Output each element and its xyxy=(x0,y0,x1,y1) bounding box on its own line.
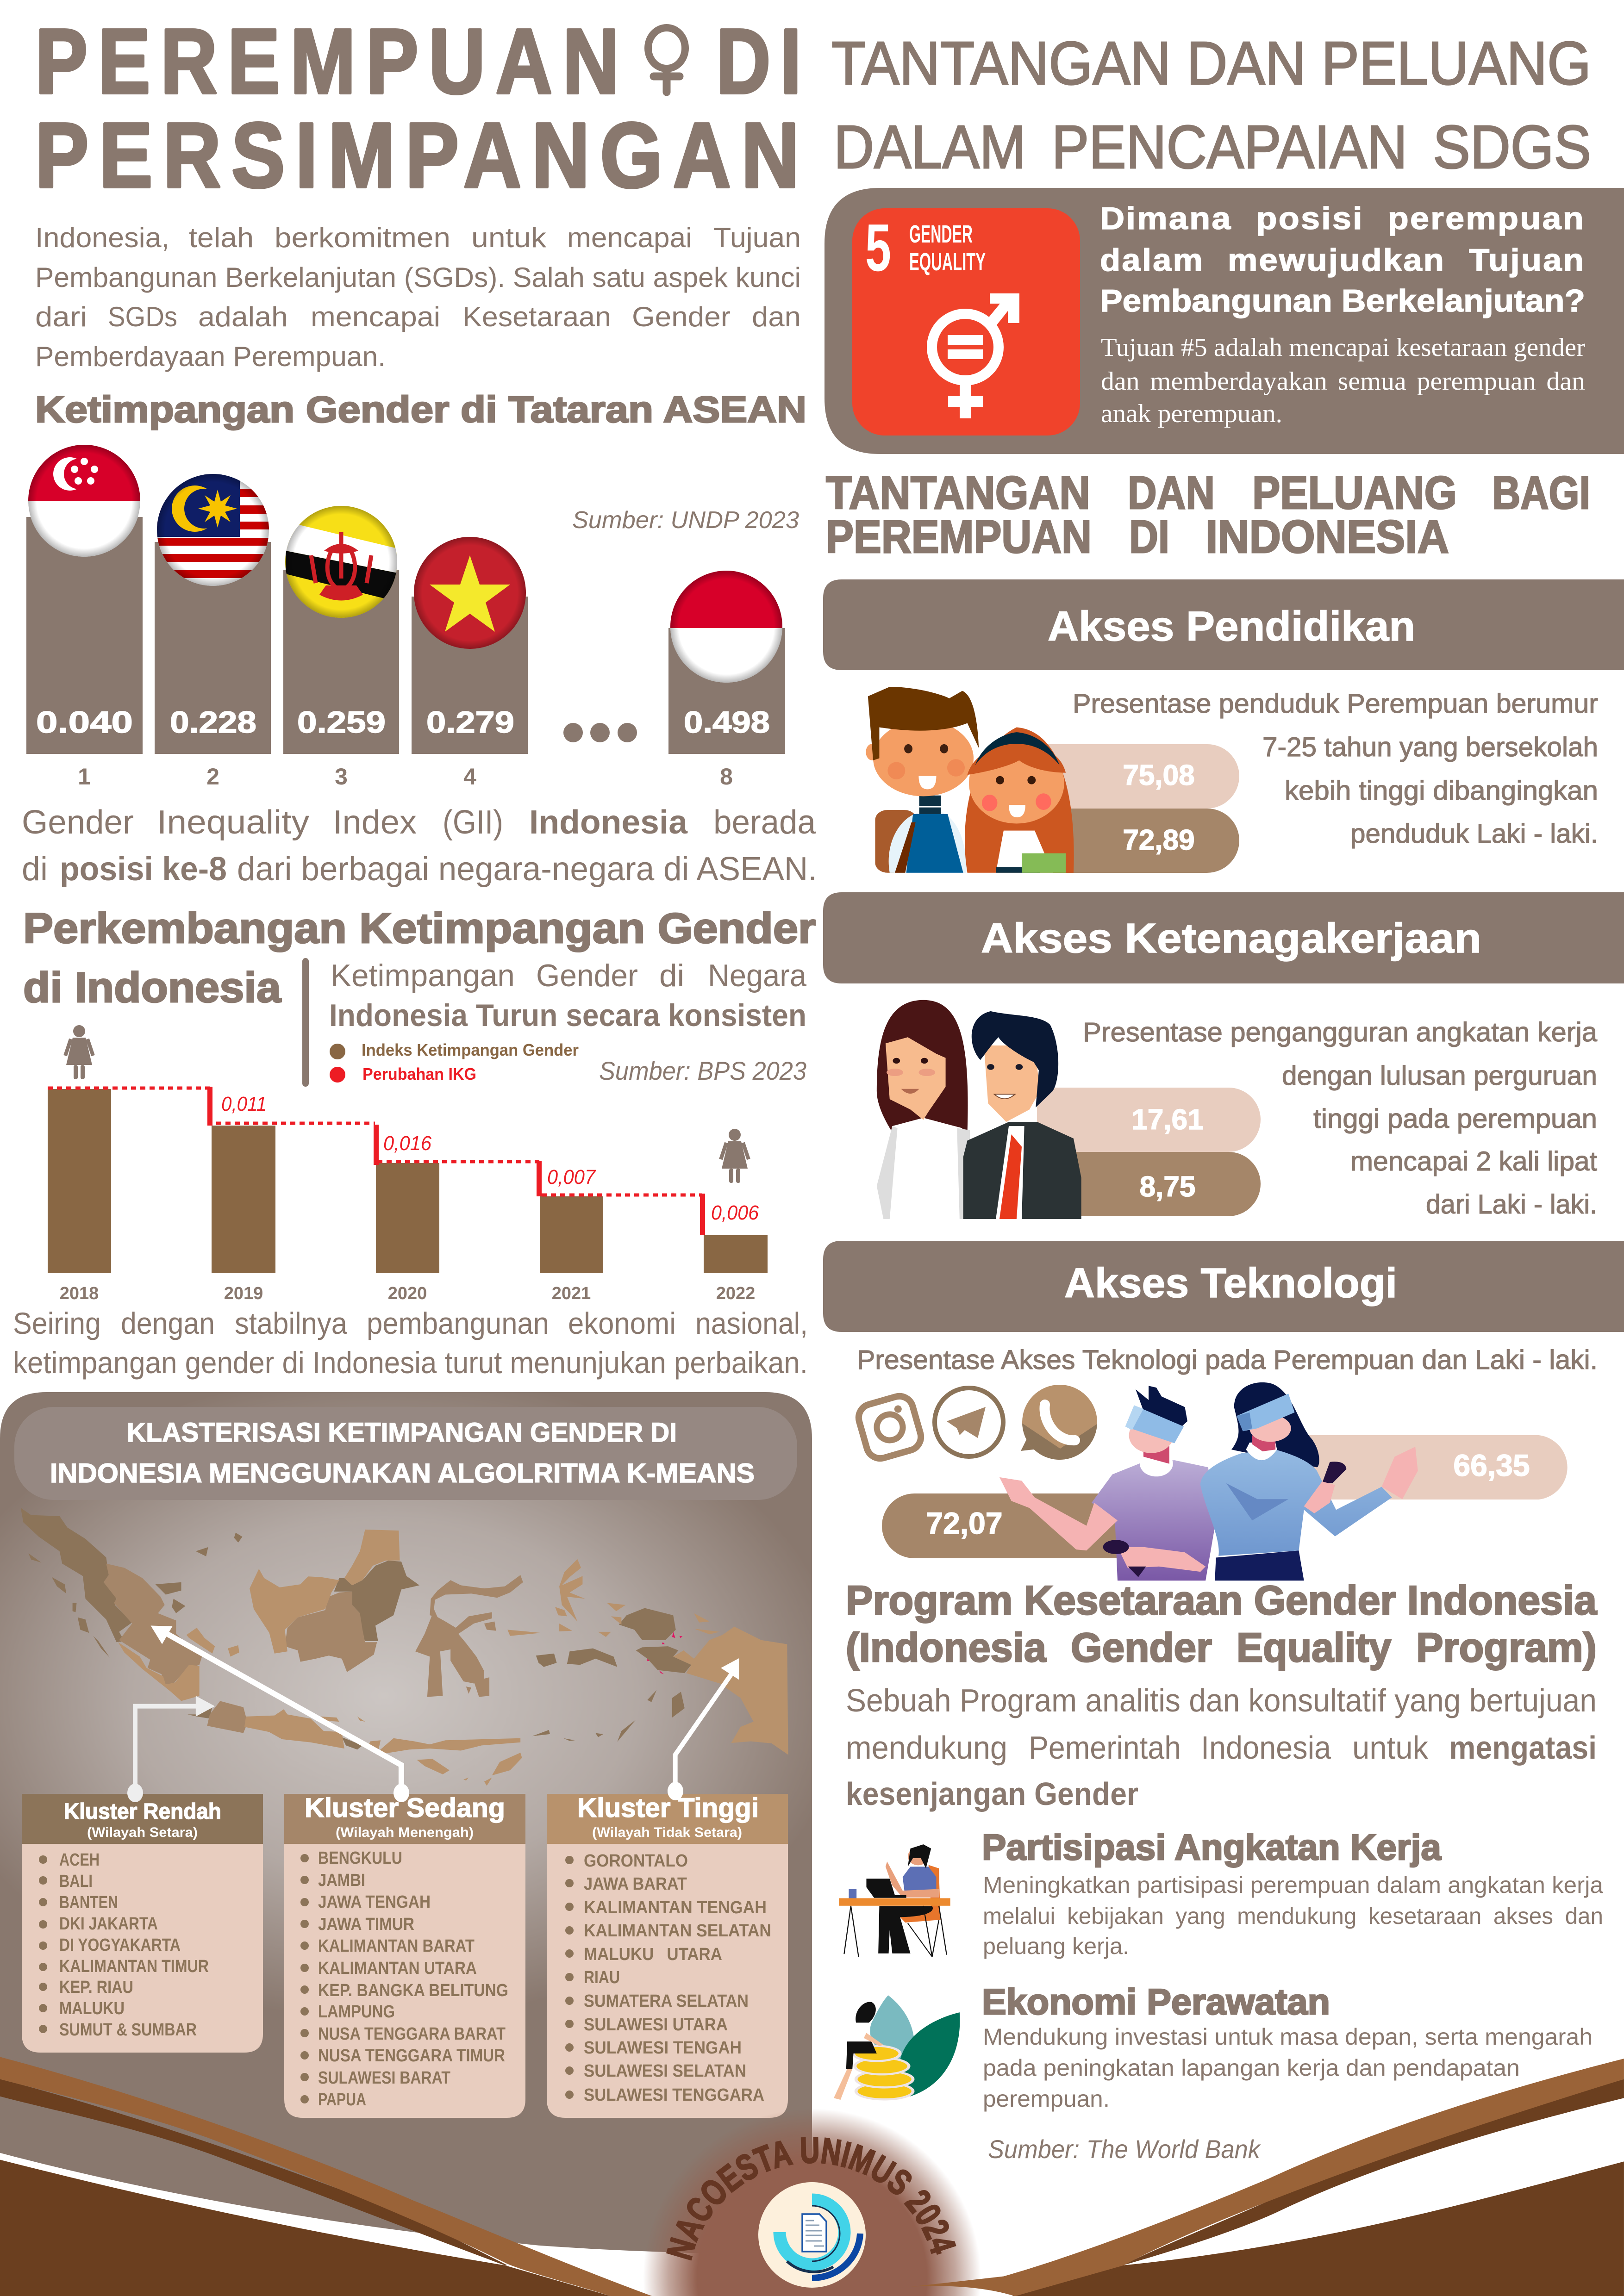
panel title: KLASTERISASI KETIMPANGAN GENDER DI xyxy=(127,1418,677,1448)
card: Kluster Tinggi: (Wilayah Tidak Setara) xyxy=(592,1825,742,1840)
heading: Tantangan dan Peluang bagi Perempuan: INDONESIA xyxy=(1206,511,1449,563)
GII paragraph: Index xyxy=(333,804,417,841)
section bar: Akses Teknologi: Akses Teknologi xyxy=(1064,1260,1397,1307)
list: Tinggi: SUMATERA SELATAN xyxy=(584,1991,749,2011)
bar values xyxy=(36,705,770,739)
icon: whatsapp xyxy=(1018,1384,1102,1462)
arrow: Kluster Rendah xyxy=(127,1696,215,1801)
heading: Tantangan dan Peluang bagi Perempuan: DI xyxy=(1129,511,1169,563)
heading: Tantangan dan Peluang bagi Perempuan: DAN xyxy=(1128,467,1215,519)
change labels: 0,006 xyxy=(711,1201,759,1224)
text: partisipasi description: peluang kerja. xyxy=(983,1933,1129,1959)
list: Tinggi: GORONTALO xyxy=(584,1851,688,1871)
pills: teknologi values xyxy=(882,1435,1568,1558)
footer wave left xyxy=(0,2057,725,2296)
list: Sedang: KEP. BANGKA BELITUNG xyxy=(318,1981,508,2000)
list: Rendah: KALIMANTAN TIMUR xyxy=(59,1957,209,1976)
footer wave right xyxy=(912,2059,1624,2296)
heading: Perkembangan Ketimpangan xyxy=(23,905,816,1011)
list: Sedang: NUSA TENGGARA TIMUR xyxy=(318,2046,505,2066)
logo glow xyxy=(643,2109,981,2296)
paragraph: Seiring dengan: ketimpangan gender di Indonesia turut menunjukan perbaikan. xyxy=(13,1345,808,1380)
intro paragraph: Pemberdayaan Perempuan. xyxy=(35,341,386,372)
question heading xyxy=(1100,201,1585,318)
source: BPS: Sumber: BPS 2023 xyxy=(599,1056,806,1085)
flag: Brunei xyxy=(285,506,397,618)
list: Rendah: BALI xyxy=(59,1872,93,1891)
intro paragraph: untuk xyxy=(471,222,547,253)
heading: Ketimpangan Gender ASEAN: Ketimpangan Gender di Tataran ASEAN xyxy=(35,389,806,430)
bar values: 0.279 xyxy=(426,705,514,739)
question heading: Dimana posisi perempuan xyxy=(1100,201,1585,236)
legend: Indeks Ketimpangan Gender xyxy=(362,1040,579,1059)
intro paragraph: SGDs xyxy=(108,301,177,332)
description: Tujuan #5 adalah mencapai kesetaraan gender xyxy=(1101,333,1585,362)
card: Kluster Rendah: Kluster Rendah xyxy=(64,1799,221,1824)
icon: SDG 5 red tile: GENDER xyxy=(909,220,973,248)
GII paragraph: posisi ke-8 xyxy=(60,851,227,888)
list: Tinggi: SULAWESI TENGAH xyxy=(584,2038,742,2058)
paragraph: ketenagakerjaan: dari Laki - laki. xyxy=(1426,1189,1597,1220)
GII paragraph: Inequality xyxy=(157,804,309,841)
year labels: 2020 xyxy=(388,1284,427,1303)
pills: ketenagakerjaan values: 8,75 xyxy=(1140,1171,1195,1203)
GII paragraph: berada xyxy=(713,804,816,841)
intro paragraph: telah xyxy=(189,222,254,253)
section bar: Akses Teknologi xyxy=(823,1241,1624,1332)
paragraph: program description: Pemerintah xyxy=(1029,1730,1181,1766)
heading: Perkembangan Ketimpangan: Perkembangan Ketimpangan Gender xyxy=(23,905,816,952)
icon: SDG 5 red tile: EQUALITY xyxy=(909,248,986,276)
map: Indonesia clusters xyxy=(21,1508,788,1786)
GII paragraph xyxy=(22,804,817,888)
year labels: 2022 xyxy=(716,1284,755,1303)
bar values: 0.228 xyxy=(170,705,256,739)
panel title xyxy=(14,1407,797,1500)
paragraph: pendidikan: 7-25 tahun yang bersekolah xyxy=(1262,732,1598,762)
title: Perempuan di Persimpangan: PEREMPUAN xyxy=(35,10,630,113)
rank labels: 1 xyxy=(78,764,91,790)
list: Tinggi: RIAU xyxy=(584,1968,620,1987)
paragraph: pendidikan: Presentase penduduk Perempuan berumur xyxy=(1073,689,1598,719)
list: Sedang: JAWA TIMUR xyxy=(318,1915,414,1934)
illustration: woman at desk xyxy=(839,1844,950,1957)
list: Sedang: SULAWESI BARAT xyxy=(318,2068,450,2088)
bar values: 0.040 xyxy=(36,705,133,739)
bar values: 0.498 xyxy=(684,705,770,739)
year labels: 2019 xyxy=(224,1284,263,1303)
title: Perempuan di Persimpangan: PERSIMPANGAN xyxy=(35,104,810,207)
intro paragraph xyxy=(35,222,801,372)
flag: Malaysia xyxy=(157,474,269,586)
paragraph: ketenagakerjaan: tinggi pada perempuan xyxy=(1313,1104,1597,1134)
card: Kluster Rendah: (Wilayah Setara) xyxy=(87,1825,198,1840)
icon: SDG 5 red tile: 5 xyxy=(865,210,891,285)
heading: Tantangan dan Peluang bagi Perempuan: PEREMPUAN xyxy=(826,511,1092,563)
intro paragraph: mencapai xyxy=(567,222,692,253)
legend: Perubahan IKG xyxy=(362,1064,476,1083)
list: Tinggi: SULAWESI UTARA xyxy=(584,2015,728,2035)
text: teknologi caption: Presentase Akses Teknologi pada Perempuan dan Laki - laki. xyxy=(857,1345,1598,1375)
subtitle: Tantangan dan Peluang xyxy=(831,29,1591,181)
arrow: Kluster Tinggi xyxy=(668,1658,739,1799)
arrow: Kluster Sedang xyxy=(151,1625,409,1801)
section bar: Akses Pendidikan: Akses Pendidikan xyxy=(1048,604,1415,650)
intro paragraph: Gender xyxy=(632,301,731,332)
year labels xyxy=(60,1284,755,1303)
intro paragraph: Kesetaraan xyxy=(462,301,611,332)
intro paragraph: berkomitmen xyxy=(275,222,450,253)
icon: female symbol xyxy=(648,28,685,92)
text: ekonomi description: Mendukung investasi untuk masa depan, serta mengarah xyxy=(983,2024,1593,2050)
GII paragraph: (GII) xyxy=(443,804,503,841)
source: World Bank: Sumber: The World Bank xyxy=(988,2134,1262,2164)
card: Kluster Sedang: Kluster Sedang xyxy=(305,1793,505,1823)
paragraph: program description: mendukung xyxy=(846,1730,1007,1766)
subheading: Indonesia turun: Ketimpangan xyxy=(331,958,515,993)
icon: woman 2018 xyxy=(65,1025,93,1079)
paragraph: program description: Indonesia xyxy=(1201,1730,1331,1766)
description: dan memberdayakan semua perempuan dan xyxy=(1101,367,1585,396)
list: Rendah: SUMUT & SUMBAR xyxy=(59,2020,197,2040)
icon: telegram xyxy=(935,1388,1003,1456)
intro paragraph: dari xyxy=(35,301,87,332)
list: Rendah: DI YOGYAKARTA xyxy=(59,1935,181,1955)
list: Tinggi: KALIMANTAN TENGAH xyxy=(584,1898,767,1917)
intro paragraph: dan xyxy=(752,301,801,332)
heading: Tantangan dan Peluang bagi Perempuan: TANTANGAN xyxy=(826,467,1090,519)
subheading: Indonesia turun: Negara xyxy=(708,958,806,993)
pills: pendidikan values: 75,08 xyxy=(1123,759,1195,791)
heading: Partisipasi Angkatan Kerja: Partisipasi Angkatan Kerja xyxy=(982,1827,1442,1867)
icon: instagram xyxy=(856,1393,924,1462)
subheading: Indonesia turun: di xyxy=(659,958,684,993)
pills: ketenagakerjaan values xyxy=(1037,1088,1261,1216)
paragraph: Seiring dengan: stabilnya xyxy=(235,1306,347,1340)
ellipsis dots xyxy=(563,723,637,742)
intro paragraph: Pembangunan Berkelanjutan (SGDs). Salah satu aspek kunci xyxy=(35,262,801,293)
list: Sedang xyxy=(300,1848,508,2109)
list: Sedang: BENGKULU xyxy=(318,1848,402,1868)
section bar: Akses Pendidikan xyxy=(823,579,1624,670)
paragraph: pendidikan: penduduk Laki - laki. xyxy=(1350,819,1598,849)
text: partisipasi description xyxy=(983,1872,1603,1959)
paragraph: Seiring dengan: ekonomi xyxy=(568,1306,676,1340)
list: Tinggi: KALIMANTAN SELATAN xyxy=(584,1921,771,1941)
panel: klasterisasi xyxy=(0,1392,812,2296)
intro paragraph: Indonesia, xyxy=(35,222,169,253)
heading: Tantangan dan Peluang bagi Perempuan: PELUANG xyxy=(1252,467,1457,519)
change labels: 0,016 xyxy=(383,1132,431,1155)
list: Sedang: KALIMANTAN UTARA xyxy=(318,1959,477,1978)
flag: Singapore xyxy=(28,444,141,557)
list: Rendah: BANTEN xyxy=(59,1893,118,1912)
icon: SDG 5 red tile xyxy=(852,208,1080,436)
divider bar xyxy=(302,958,309,1087)
section bar: Akses Ketenagakerjaan xyxy=(823,892,1624,983)
list: Tinggi: MALUKU UTARA xyxy=(584,1945,722,1964)
text: partisipasi description: Meningkatkan partisipasi perempuan dalam angkatan kerja xyxy=(983,1872,1603,1898)
source: UNDP: Sumber: UNDP 2023 xyxy=(572,507,799,534)
list: Tinggi xyxy=(565,1851,771,2105)
heading: Program Kesetaraan Gender: (Indonesia xyxy=(846,1624,1047,1670)
subheading: Indonesia turun: Gender xyxy=(536,958,638,993)
pills: ketenagakerjaan values: 17,61 xyxy=(1131,1104,1204,1136)
year labels: 2021 xyxy=(552,1284,591,1303)
pills: pendidikan values: 72,89 xyxy=(1123,824,1195,856)
paragraph: ketenagakerjaan: Presentase pengangguran angkatan kerja xyxy=(1083,1017,1598,1047)
bar chart: GII ASEAN ranking xyxy=(26,444,785,790)
rank labels xyxy=(78,764,733,790)
list: Rendah: KEP. RIAU xyxy=(59,1978,133,1997)
change labels: 0,011 xyxy=(221,1093,267,1115)
GII paragraph: di xyxy=(22,851,48,888)
paragraph: program description xyxy=(846,1682,1597,1812)
section bar: Akses Ketenagakerjaan: Akses Ketenagakerjaan xyxy=(981,915,1481,962)
GII paragraph: Indonesia xyxy=(529,804,688,841)
paragraph: program description: mengatasi xyxy=(1449,1730,1597,1766)
card: Kluster Sedang xyxy=(284,1784,525,2118)
year labels: 2018 xyxy=(60,1284,99,1303)
paragraph: Seiring dengan: dengan xyxy=(121,1306,215,1340)
list: Sedang: KALIMANTAN BARAT xyxy=(318,1936,475,1956)
paragraph: program description: untuk xyxy=(1352,1730,1429,1766)
card: Kluster Sedang: (Wilayah Menengah) xyxy=(336,1825,474,1840)
rank labels: 8 xyxy=(720,764,733,790)
heading: Tantangan dan Peluang bagi Perempuan: BAGI xyxy=(1492,467,1590,519)
bar chart: IKG 2018-2022 xyxy=(48,1025,768,1303)
card: Kluster Tinggi: Kluster Tinggi xyxy=(577,1793,759,1823)
pills: teknologi values: 66,35 xyxy=(1453,1448,1530,1482)
question heading: Pembangunan Berkelanjutan? xyxy=(1100,283,1585,318)
pills: pendidikan values xyxy=(1037,744,1239,873)
description xyxy=(1101,333,1585,428)
description: anak perempuan. xyxy=(1101,399,1282,428)
card: Kluster Tinggi xyxy=(547,1782,788,2118)
list: Tinggi: SULAWESI SELATAN xyxy=(584,2061,746,2081)
illustration: students xyxy=(866,687,1074,873)
marks: pink islands xyxy=(647,1632,682,1674)
paragraph: ketenagakerjaan: dengan lulusan perguruan xyxy=(1282,1061,1597,1091)
heading: Program Kesetaraan Gender: Program Kesetaraan Gender Indonesia xyxy=(846,1577,1597,1623)
question heading: dalam mewujudkan Tujuan xyxy=(1100,243,1585,278)
GII paragraph: dari berbagai negara-negara di ASEAN. xyxy=(237,851,817,888)
paragraph: Seiring dengan xyxy=(13,1306,808,1380)
rank labels: 4 xyxy=(463,764,476,790)
pills: teknologi values: 72,07 xyxy=(926,1506,1003,1540)
rank labels: 3 xyxy=(335,764,348,790)
paragraph: pendidikan: kebih tinggi dibangingkan xyxy=(1285,776,1598,806)
subheading: Indonesia turun: Indonesia Turun secara konsisten xyxy=(329,998,806,1033)
heading: Ekonomi Perawatan: Ekonomi Perawatan xyxy=(982,1981,1330,2022)
paragraph: ketenagakerjaan: mencapai 2 kali lipat xyxy=(1350,1146,1597,1176)
title: Perempuan di Persimpangan xyxy=(35,10,811,207)
panel: SDG 5 gender equality xyxy=(824,188,1624,454)
icon: woman 2022 xyxy=(721,1129,749,1183)
text: ekonomi description: perempuan. xyxy=(983,2086,1110,2112)
illustration: VR users xyxy=(999,1382,1418,1580)
logo: Nacoesta Unimus: NACOESTA UNIMUS 2024 xyxy=(659,2130,964,2264)
flag: Vietnam xyxy=(414,537,526,649)
paragraph: program description: Sebuah Program analitis dan konsultatif yang bertujuan xyxy=(846,1682,1597,1718)
list: Tinggi: SULAWESI TENGGARA xyxy=(584,2085,764,2105)
list: Rendah xyxy=(39,1850,209,2040)
list: Sedang: JAMBI xyxy=(318,1871,365,1890)
list: Rendah: DKI JAKARTA xyxy=(59,1914,158,1934)
rank labels: 2 xyxy=(206,764,219,790)
list: Rendah: ACEH xyxy=(59,1850,100,1870)
paragraph: ketenagakerjaan xyxy=(1083,1017,1598,1220)
text: ekonomi description: pada peningkatan lapangan kerja dan pendapatan xyxy=(983,2055,1520,2081)
change labels xyxy=(221,1093,759,1224)
heading: Program Kesetaraan Gender: Equality xyxy=(1237,1624,1391,1670)
list: Sedang: LAMPUNG xyxy=(318,2002,395,2022)
intro paragraph: Tujuan xyxy=(713,222,801,253)
intro paragraph: adalah xyxy=(198,301,288,332)
list: Rendah: MALUKU xyxy=(59,1999,125,2018)
panel title: INDONESIA MENGGUNAKAN ALGOLRITMA K-MEANS xyxy=(50,1458,755,1488)
paragraph: Seiring dengan: Seiring xyxy=(13,1306,101,1340)
paragraph: pendidikan xyxy=(1073,689,1598,849)
card: Kluster Rendah xyxy=(22,1784,263,2053)
paragraph: Seiring dengan: pembangunan xyxy=(367,1306,549,1340)
text: ekonomi description xyxy=(983,2024,1593,2112)
legend xyxy=(330,1040,579,1083)
paragraph: program description: kesenjangan Gender xyxy=(846,1776,1138,1812)
list: Sedang: NUSA TENGGARA BARAT xyxy=(318,2024,506,2044)
flag: Indonesia xyxy=(670,571,782,684)
illustration: woman on coins xyxy=(834,1995,960,2100)
list: Tinggi: JAWA BARAT xyxy=(584,1874,687,1894)
intro paragraph: mencapai xyxy=(311,301,440,332)
paragraph: Seiring dengan: nasional, xyxy=(695,1306,808,1340)
subheading: Indonesia turun xyxy=(329,958,806,1033)
change labels: 0,007 xyxy=(547,1166,596,1188)
bar values: 0.259 xyxy=(297,705,386,739)
illustration: workers xyxy=(877,1000,1081,1219)
title: Perempuan di Persimpangan: DI xyxy=(716,10,811,113)
heading: Program Kesetaraan Gender: Program) xyxy=(1416,1624,1597,1670)
heading: Program Kesetaraan Gender: Gender xyxy=(1071,1624,1212,1670)
text: partisipasi description: melalui kebijakan yang mendukung kesetaraan akses dan xyxy=(983,1903,1603,1929)
GII paragraph: Gender xyxy=(22,804,134,841)
heading: Program Kesetaraan Gender xyxy=(846,1577,1597,1670)
heading: Tantangan dan Peluang bagi Perempuan xyxy=(826,467,1590,563)
list: Sedang: PAPUA xyxy=(318,2090,366,2109)
list: Sedang: JAWA TENGAH xyxy=(318,1892,431,1912)
heading: Perkembangan Ketimpangan: di Indonesia xyxy=(23,964,281,1011)
